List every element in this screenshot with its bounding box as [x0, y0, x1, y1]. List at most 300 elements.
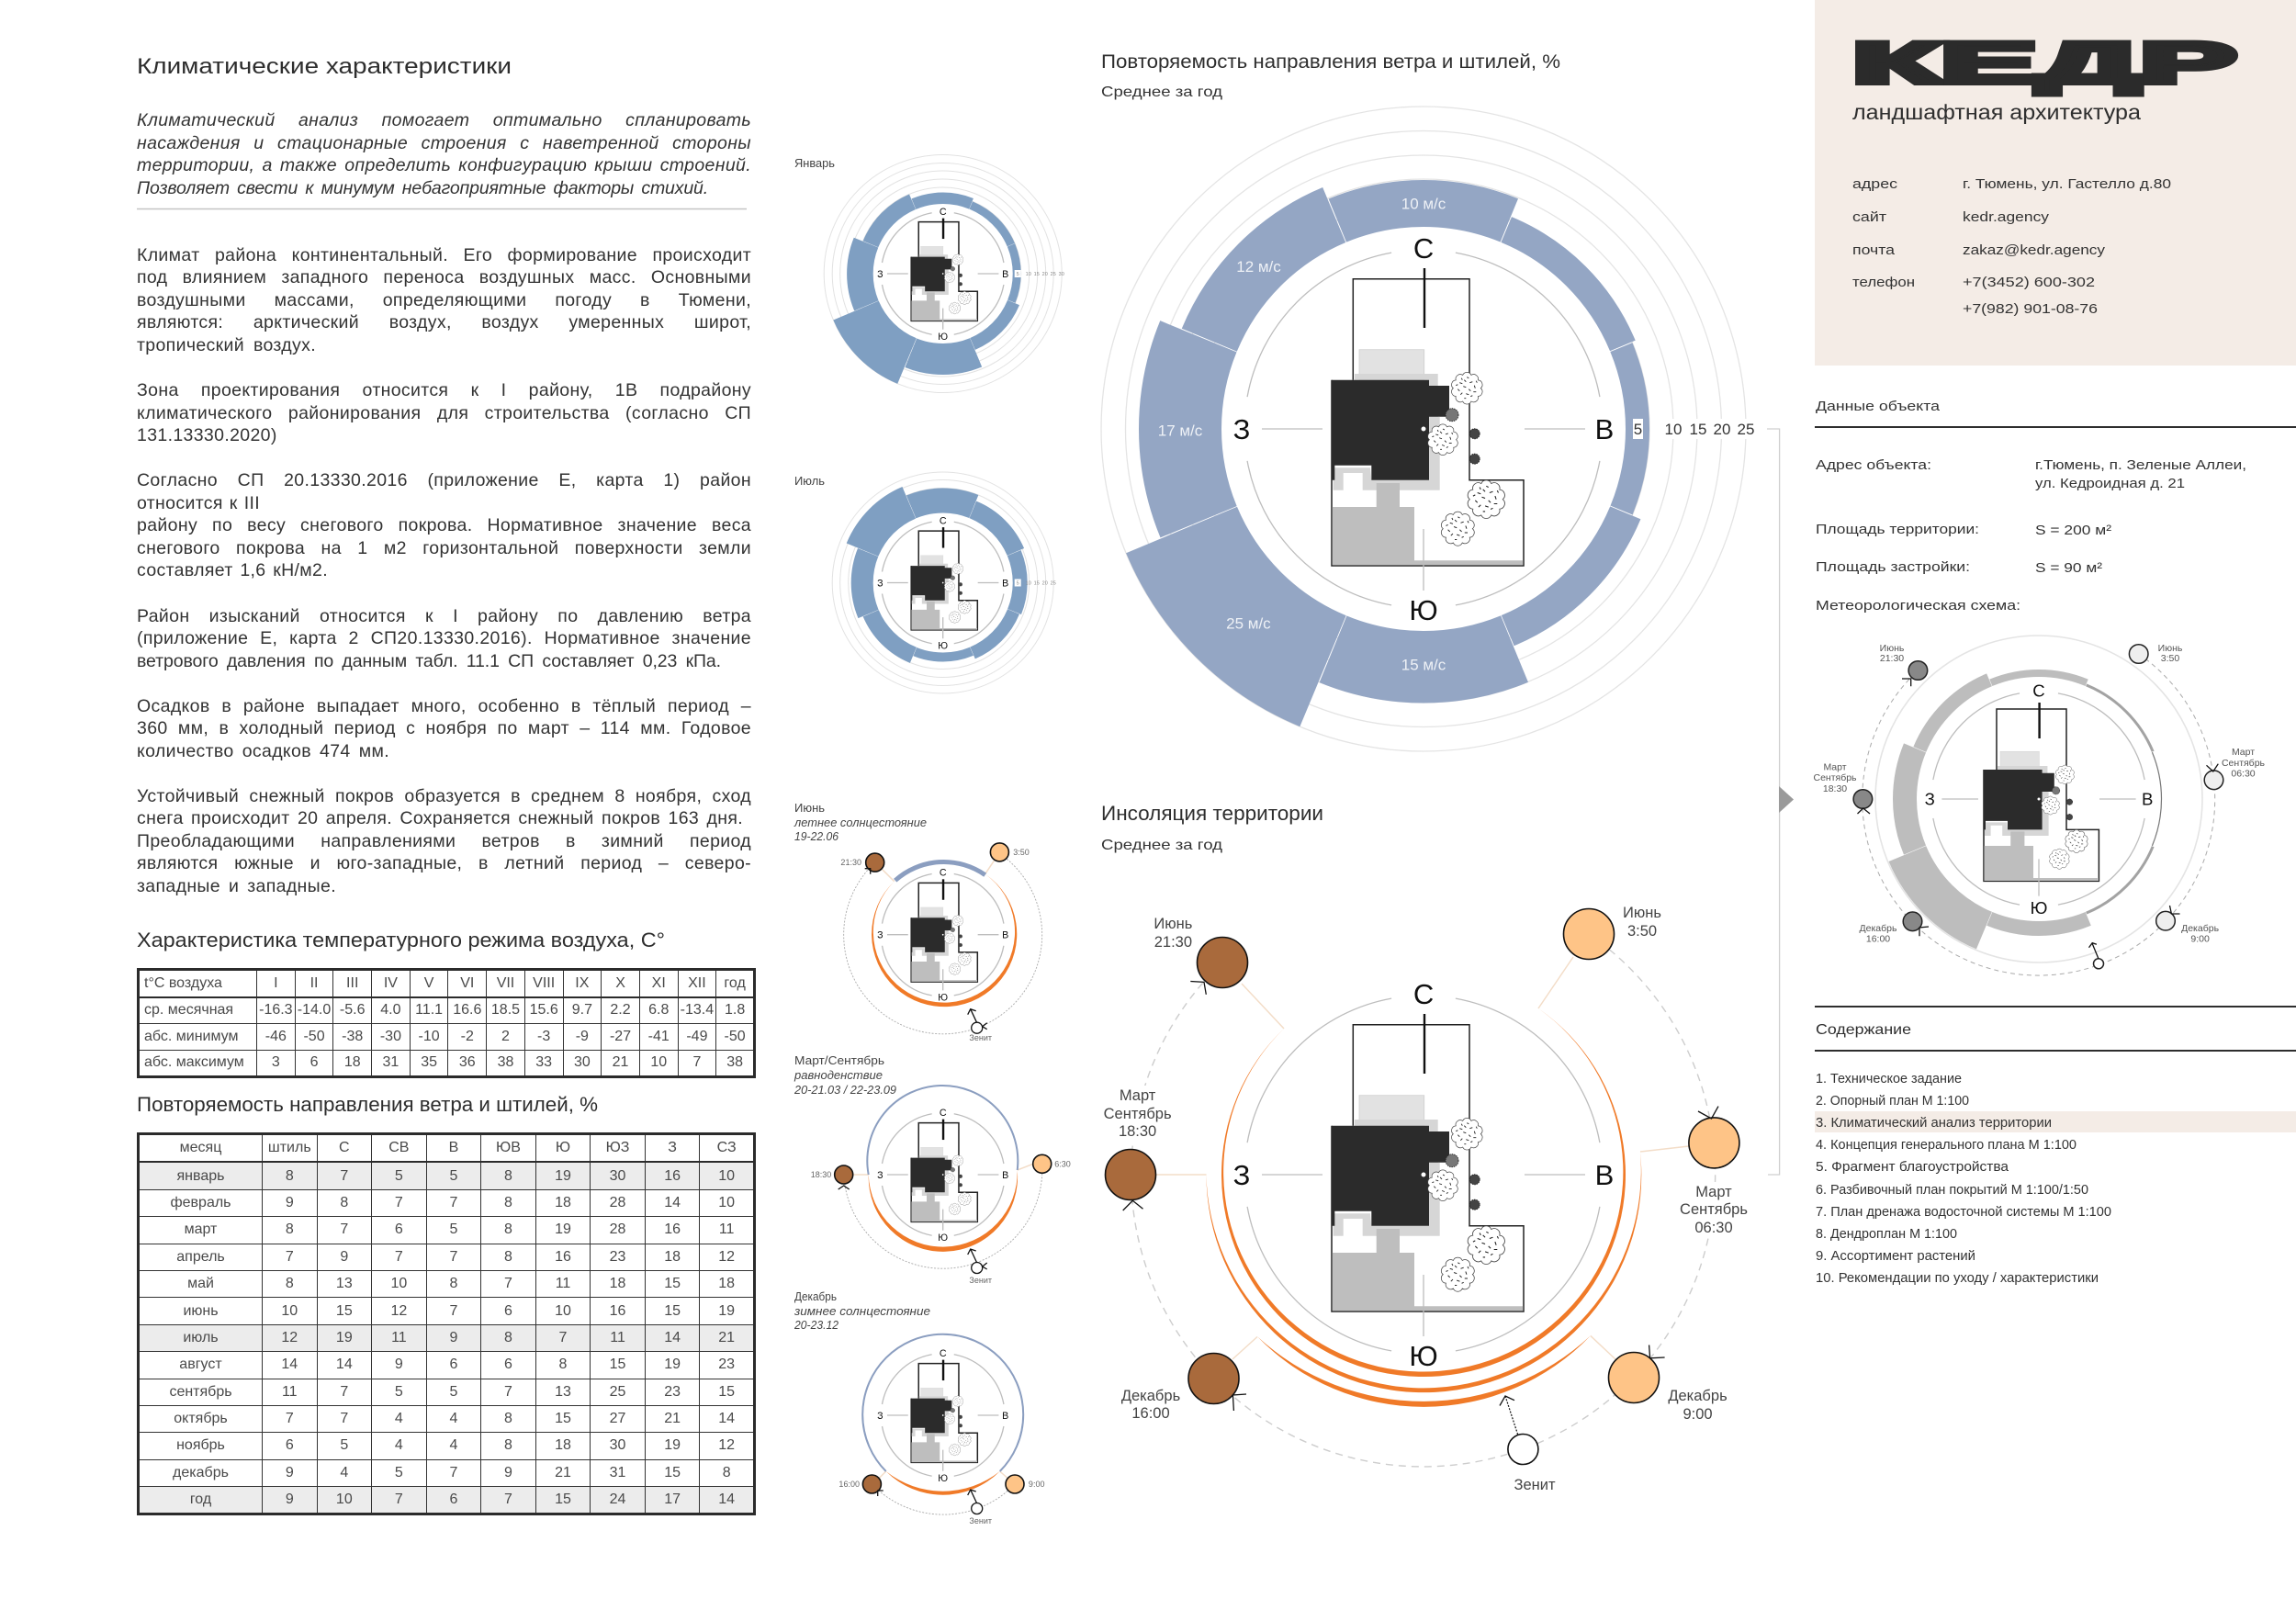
table: wind frequency: 14	[664, 1330, 681, 1345]
table: temperature: -38	[342, 1029, 363, 1044]
subheading: insolation: Среднее за год	[1101, 838, 1223, 853]
sun rays	[1131, 957, 1689, 1359]
text block: snow load: относится к III	[137, 493, 260, 513]
caption: June solstice: летнее солнцестояние	[793, 816, 927, 829]
diagram: July: 15	[1034, 580, 1040, 586]
table: wind frequency: 24	[610, 1492, 625, 1507]
table: temperature: 11.1	[415, 1002, 443, 1018]
sun labels: Июнь	[1880, 643, 1905, 654]
table: temperature: -9	[576, 1029, 589, 1044]
contents list: 4. Концепция генерального плана М 1:100	[1816, 1138, 2077, 1153]
table: wind frequency: 28	[610, 1221, 625, 1237]
table: wind frequency: 9	[286, 1195, 294, 1210]
caption: December solstice	[793, 1289, 930, 1332]
table: temperature: XII	[688, 975, 706, 991]
sun labels: 21:30	[1880, 653, 1904, 664]
text block: wind pressure: ветрового давления по данным табл. 11.1 СП составляет 0,23 кПа.	[137, 651, 721, 671]
table: wind frequency: 5	[395, 1465, 403, 1480]
table: wind frequency: 7	[504, 1492, 512, 1507]
site data list: Адрес объекта:	[1816, 457, 1931, 473]
site data list: Метеорологическая схема:	[1816, 598, 2020, 614]
table: wind frequency: 9	[395, 1356, 403, 1372]
zenith pointer	[1505, 1396, 1518, 1435]
table: wind frequency: 7	[449, 1465, 457, 1480]
diagram: December: Ю	[938, 1473, 948, 1484]
contacts: zakaz@kedr.agency	[1963, 242, 2106, 258]
table: temperature: 38	[498, 1054, 513, 1070]
table: wind frequency: ЮВ	[496, 1140, 521, 1155]
table: wind frequency: 15	[336, 1303, 353, 1319]
table: wind frequency: 16	[610, 1303, 625, 1319]
table: wind frequency: 6	[395, 1221, 403, 1237]
site plan	[1233, 232, 1614, 626]
table: wind frequency: 13	[336, 1276, 353, 1291]
table: wind frequency: сентябрь	[169, 1384, 232, 1400]
table: temperature: ср. месячная	[144, 1002, 233, 1018]
caption: equinox: 20-21.03 / 22-23.09	[793, 1083, 896, 1097]
label backgrounds	[1097, 1086, 1754, 1237]
contents list: 7. План дренажа водосточной системы М 1:100	[1816, 1205, 2111, 1220]
table: temperature: -50	[725, 1029, 746, 1044]
table: temperature: -13.4	[681, 1002, 714, 1018]
table: wind frequency: ЮЗ	[606, 1140, 629, 1155]
table: wind frequency: 19	[555, 1221, 571, 1237]
contacts: +7(982) 901-08-76	[1963, 301, 2098, 317]
panel: company header background	[1815, 0, 2296, 366]
sector speed labels	[1158, 195, 1446, 674]
table: wind frequency: штиль	[268, 1140, 311, 1155]
site plan: З	[1233, 413, 1250, 445]
text block: snow load: составляет 1,6 кН/м2.	[137, 560, 328, 580]
sun labels: Сентябрь	[1813, 772, 1857, 783]
table: wind frequency: 15	[555, 1411, 571, 1426]
table: wind frequency: 14	[718, 1411, 735, 1426]
table: wind frequency: 9	[340, 1249, 348, 1265]
table: temperature: 35	[421, 1054, 437, 1070]
text block: climate: под влиянием западного переноса воздушных масс. Основными	[137, 267, 751, 287]
diagram: June: Зенит	[969, 1033, 992, 1042]
caption: equinox: Март/Сентябрь	[794, 1053, 884, 1067]
table: wind frequency: 7	[340, 1168, 348, 1184]
table: wind frequency: СЗ	[717, 1140, 737, 1155]
diagram: June: С	[940, 868, 947, 879]
site plan: С	[1413, 978, 1434, 1010]
table: temperature: 36	[459, 1054, 476, 1070]
table: wind frequency: 8	[504, 1249, 512, 1265]
table: wind frequency: 7	[449, 1195, 457, 1210]
orange insolation arcs	[1207, 1008, 1641, 1407]
sun labels: 9:00	[1683, 1406, 1713, 1423]
table: wind frequency: 6	[504, 1356, 512, 1372]
table: wind frequency: 31	[610, 1465, 625, 1480]
table: wind frequency: 16	[664, 1221, 681, 1237]
text block: climate: Климат района континентальный. Его формирование происходит	[137, 244, 751, 265]
sector speed labels: 10 м/с	[1401, 195, 1446, 213]
sun labels: Март	[1823, 762, 1847, 773]
contents rules	[1815, 1007, 2296, 1051]
table: wind frequency: 8	[286, 1276, 294, 1291]
contacts: телефон	[1852, 275, 1915, 290]
table: wind frequency: 15	[610, 1356, 625, 1372]
sun labels: 3:50	[2161, 653, 2179, 664]
diagram: December: 9:00	[1029, 1480, 1044, 1489]
bracket linking the two diagrams	[1767, 429, 1780, 1175]
diagram: June: Ю	[938, 992, 948, 1003]
table: temperature: год	[724, 975, 746, 991]
diagram: equinox: 18:30	[811, 1170, 831, 1179]
table: wind frequency	[137, 1132, 756, 1515]
mini insolation: December	[793, 1289, 1044, 1525]
table: temperature: VIII	[533, 975, 555, 991]
diagram: June: 3:50	[1013, 848, 1030, 857]
intro text block: территории, а также определить конфигурацию крыши строений.	[137, 155, 751, 175]
meteorological scheme	[1809, 613, 2268, 985]
table: wind frequency: 10	[555, 1303, 571, 1319]
table: temperature: -14.0	[298, 1002, 331, 1018]
table: wind frequency: 4	[395, 1411, 403, 1426]
main insolation chart	[1097, 905, 1754, 1493]
sector speed labels: 15 м/с	[1401, 656, 1446, 674]
table: wind frequency: март	[185, 1221, 217, 1237]
diagram: June: 21:30	[840, 858, 861, 867]
text block: precipitation: количество осадков 474 мм.	[137, 741, 389, 761]
table: wind frequency: СВ	[388, 1140, 409, 1155]
table: wind frequency: 19	[718, 1303, 735, 1319]
arrow toward site data	[1779, 786, 1794, 813]
text block: wind pressure: (приложение Е, карта 2 СП20.13330.2016). Нормативное значение	[137, 628, 751, 648]
sun path arrowheads	[1123, 981, 1718, 1411]
sun labels	[1813, 643, 2266, 944]
caption: equinox: равноденствие	[793, 1068, 883, 1082]
site plan: Ю	[1409, 594, 1438, 626]
table: wind frequency: 8	[504, 1437, 512, 1453]
table: wind frequency: С	[339, 1140, 350, 1155]
diagram: equinox: Зенит	[969, 1276, 992, 1285]
table: wind frequency: апрель	[176, 1249, 225, 1265]
diagram: equinox	[811, 1086, 1071, 1285]
table: wind frequency: 13	[555, 1384, 571, 1400]
table: wind frequency: 12	[718, 1249, 735, 1265]
table: wind frequency: 25	[610, 1384, 625, 1400]
diagram: equinox: С	[940, 1108, 947, 1119]
site plan: С	[1413, 232, 1434, 265]
sun labels: Сентябрь	[1680, 1201, 1748, 1218]
text block: wind pressure	[137, 606, 751, 671]
heading: wind frequency table: Повторяемость направления ветра и штилей, %	[137, 1093, 598, 1116]
table: wind frequency: 7	[340, 1411, 348, 1426]
table: temperature: VII	[497, 975, 514, 991]
table: wind frequency: июнь	[183, 1303, 219, 1319]
table: wind frequency: 9	[504, 1465, 512, 1480]
site plan: В	[1595, 1159, 1614, 1191]
table: wind frequency: 14	[664, 1195, 681, 1210]
table: wind frequency: 8	[504, 1221, 512, 1237]
table: wind frequency: 5	[395, 1168, 403, 1184]
sun labels: 16:00	[1131, 1405, 1170, 1422]
caption: December solstice: Декабрь	[794, 1289, 837, 1303]
table: wind frequency: 11	[719, 1221, 734, 1237]
diagram: January: 25	[1051, 272, 1056, 277]
table: wind frequency: 18	[555, 1195, 571, 1210]
table: wind frequency: 10	[336, 1492, 353, 1507]
sun labels: Сентябрь	[2222, 758, 2266, 769]
table: wind frequency: 10	[718, 1168, 735, 1184]
diagram: December: З	[877, 1411, 884, 1422]
sun labels: 06:30	[2231, 768, 2256, 779]
table: temperature: 10	[650, 1054, 667, 1070]
text block: snow load: району по весу снегового покрова. Нормативное значение веса	[137, 515, 751, 535]
caption: December solstice: зимнее солнцестояние	[793, 1304, 930, 1318]
site plan	[1233, 978, 1614, 1372]
contents list: 3. Климатический анализ территории	[1816, 1116, 2052, 1131]
contacts: сайт	[1852, 209, 1886, 225]
table: wind frequency: 11	[610, 1330, 625, 1345]
site data list: S = 90 м²	[2035, 560, 2102, 576]
scale labels: 10	[1665, 421, 1682, 438]
table: wind frequency: 14	[718, 1492, 735, 1507]
diagram: equinox: Ю	[938, 1233, 948, 1244]
scale labels: 5	[1634, 421, 1642, 438]
table: wind frequency: 10	[281, 1303, 298, 1319]
diagram: July: В	[1002, 578, 1008, 589]
table: temperature: -27	[610, 1029, 631, 1044]
site data list: ул. Кедроидная д. 21	[2035, 476, 2185, 491]
table: temperature: абс. минимум	[144, 1029, 238, 1044]
mini insolation: June	[793, 801, 1042, 1042]
mini insolation: March / September	[793, 1053, 1071, 1285]
table: wind frequency: 5	[340, 1437, 348, 1453]
table: temperature: 4.0	[380, 1002, 401, 1018]
table: wind frequency: июль	[183, 1330, 219, 1345]
caption: December solstice: 20-23.12	[793, 1318, 839, 1332]
table: temperature: IX	[575, 975, 589, 991]
text block: snow load	[137, 470, 751, 580]
contacts: г. Тюмень, ул. Гастелло д.80	[1963, 176, 2171, 192]
sector speed labels: 25 м/с	[1226, 615, 1271, 632]
table: wind frequency: 8	[504, 1195, 512, 1210]
contents list: 5. Фрагмент благоустройства	[1816, 1160, 2009, 1175]
table: wind frequency: 5	[449, 1384, 457, 1400]
table: wind frequency: Ю	[556, 1140, 570, 1155]
table: temperature: 16.6	[453, 1002, 481, 1018]
text block: climate: воздушными массами, определяющими погоду в Тюмени,	[137, 290, 751, 310]
table: temperature: -10	[419, 1029, 440, 1044]
sector speed labels: 12 м/с	[1236, 258, 1281, 276]
sun labels: Июнь	[2158, 643, 2183, 654]
table: temperature	[137, 968, 756, 1078]
logo: КЕДР	[1852, 31, 2236, 96]
table: wind frequency: 8	[340, 1195, 348, 1210]
text block: snow cover: западные и западные.	[137, 876, 336, 896]
table: temperature: -50	[303, 1029, 325, 1044]
diagram: June: З	[877, 929, 884, 940]
table: temperature: 2.2	[610, 1002, 631, 1018]
sunset suns	[1106, 937, 1247, 1403]
diagram: July: 20	[1042, 580, 1048, 586]
table: wind frequency: 7	[395, 1492, 403, 1507]
table: temperature: 3	[272, 1054, 280, 1070]
text block: snow cover: Преобладающими направлениями ветров в зимний период	[137, 831, 751, 851]
sun labels: 16:00	[1866, 933, 1890, 944]
table: wind frequency: 12	[718, 1437, 735, 1453]
table: wind frequency: 18	[555, 1437, 571, 1453]
table: temperature: 31	[382, 1054, 399, 1070]
table: temperature: X	[615, 975, 625, 991]
contacts: +7(3452) 600-302	[1963, 275, 2095, 290]
text block: snow load: Согласно СП 20.13330.2016 (приложение Е, карта 1) район	[137, 470, 751, 490]
sun labels: Зенит	[1514, 1477, 1556, 1493]
diagram: January: 10	[1026, 272, 1031, 277]
diagram: December	[838, 1334, 1044, 1525]
site data list: Площадь территории:	[1816, 522, 1979, 537]
table: temperature: -30	[380, 1029, 401, 1044]
sun labels: Март	[2232, 747, 2255, 758]
table: wind frequency: 12	[390, 1303, 407, 1319]
table: wind frequency: 11	[556, 1276, 570, 1291]
table: wind frequency: год	[190, 1492, 211, 1507]
site plan: В	[1595, 413, 1614, 445]
diagram: July: 10	[1026, 580, 1031, 586]
table: wind frequency: 6	[286, 1437, 294, 1453]
table: wind frequency: 15	[555, 1492, 571, 1507]
table: wind frequency: 4	[449, 1437, 457, 1453]
sun labels: Декабрь	[2181, 923, 2220, 934]
table: wind frequency: 4	[395, 1437, 403, 1453]
text block: snow cover	[137, 786, 751, 896]
table: wind frequency: 5	[395, 1384, 403, 1400]
text block: climate: тропический воздух.	[137, 335, 316, 355]
table: wind frequency: 16	[555, 1249, 571, 1265]
text block: climate	[137, 244, 751, 355]
caption: June solstice: 19-22.06	[794, 829, 839, 843]
table: wind frequency: 7	[504, 1276, 512, 1291]
title: Климатические характеристики	[137, 54, 512, 79]
diagram: January: 15	[1034, 272, 1040, 277]
table: wind frequency: 7	[449, 1249, 457, 1265]
grey wind sectors	[1852, 613, 2225, 985]
diagram: December: 16:00	[838, 1480, 860, 1489]
caption: equinox	[793, 1053, 896, 1097]
contents list: 8. Дендроплан М 1:100	[1816, 1227, 1957, 1242]
diagram: July: 25	[1051, 580, 1056, 586]
table: wind frequency: 5	[449, 1221, 457, 1237]
table: temperature: 18.5	[491, 1002, 520, 1018]
sun labels: 21:30	[1154, 934, 1192, 951]
table: wind frequency: 4	[340, 1465, 348, 1480]
dashed sun path	[1863, 654, 2215, 975]
contents list: 10. Рекомендации по уходу / характеристики	[1816, 1271, 2099, 1286]
diagram: January: 20	[1042, 272, 1048, 277]
text block: snow cover: Устойчивый снежный покров образуется в среднем 8 ноября, сход	[137, 786, 751, 806]
sun labels: Декабрь	[1121, 1388, 1180, 1404]
sun labels: Март	[1695, 1184, 1732, 1200]
contents list: 1. Техническое задание	[1816, 1072, 1962, 1086]
subheading: wind rose: Среднее за год	[1101, 84, 1223, 100]
diagram: January: З	[877, 269, 884, 280]
table: wind frequency: 19	[664, 1356, 681, 1372]
diagram: July: С	[940, 515, 947, 526]
table: wind frequency: 30	[610, 1168, 625, 1184]
table: wind frequency: октябрь	[174, 1411, 228, 1426]
table: temperature: XI	[652, 975, 666, 991]
table: wind frequency: 8	[723, 1465, 731, 1480]
tagline: ландшафтная архитектура	[1852, 100, 2141, 124]
table: wind frequency: 19	[664, 1437, 681, 1453]
table: wind frequency: 15	[664, 1465, 681, 1480]
table: wind frequency: 10	[390, 1276, 407, 1291]
table: wind frequency: ноябрь	[176, 1437, 225, 1453]
table: wind frequency: 18	[664, 1249, 681, 1265]
sun labels: Март	[1120, 1087, 1156, 1104]
diagram: December: Зенит	[969, 1516, 992, 1525]
intro text block: насаждения и стационарные строения с наветренной стороны	[137, 133, 751, 153]
text block: zone	[137, 380, 751, 445]
sun labels: Декабрь	[1668, 1388, 1728, 1404]
table: wind frequency: 15	[664, 1303, 681, 1319]
table: temperature: -2	[461, 1029, 474, 1044]
table: temperature: 1.8	[725, 1002, 745, 1018]
text block: precipitation: Осадков в районе выпадает много, особенно в тёплый период –	[137, 696, 751, 716]
table: wind frequency: 9	[286, 1465, 294, 1480]
heading: insolation: Инсоляция территории	[1101, 802, 1323, 825]
main wind rose chart	[1081, 86, 1766, 771]
site data list: Площадь застройки:	[1816, 559, 1970, 575]
contacts: почта	[1852, 242, 1896, 258]
intro text block: Климатический анализ помогает оптимально спланировать	[137, 110, 751, 130]
table: temperature: -5.6	[340, 1002, 366, 1018]
diagram: January: 30	[1059, 272, 1064, 277]
sector speed labels: 17 м/с	[1158, 422, 1203, 439]
table: wind frequency: 8	[559, 1356, 567, 1372]
table: wind frequency: 9	[449, 1330, 457, 1345]
table: wind frequency: 4	[449, 1411, 457, 1426]
diagram: June: В	[1002, 929, 1008, 940]
diagram: equinox: В	[1002, 1170, 1008, 1181]
site data list: S = 200 м²	[2035, 523, 2111, 538]
diagram: December: В	[1002, 1411, 1008, 1422]
table: temperature: -16.3	[259, 1002, 293, 1018]
text block: snow cover: снега происходит 20 апреля. Сохраняется снежный покров 163 дня.	[137, 808, 743, 828]
scale labels	[1633, 419, 1754, 439]
text block: precipitation	[137, 696, 751, 761]
diagram: July	[829, 469, 1057, 696]
text block: zone: 131.13330.2020)	[137, 425, 277, 445]
table: wind frequency: 8	[504, 1330, 512, 1345]
table: wind frequency: 9	[286, 1492, 294, 1507]
scale labels: 20	[1714, 421, 1730, 438]
heading: site data: Данные объекта	[1816, 399, 1941, 414]
table: wind frequency: 7	[340, 1221, 348, 1237]
table: temperature: IV	[384, 975, 398, 991]
table: wind frequency: 23	[718, 1356, 735, 1372]
table: wind frequency: 6	[504, 1303, 512, 1319]
table: wind frequency: месяц	[180, 1140, 221, 1155]
site plan: В	[2142, 790, 2153, 809]
table: temperature: 15.6	[530, 1002, 558, 1018]
table: wind frequency: 15	[718, 1384, 735, 1400]
table: wind frequency: 21	[555, 1465, 571, 1480]
table: wind frequency: 14	[281, 1356, 298, 1372]
arrowheads	[1857, 679, 2218, 959]
site plan: З	[1233, 1159, 1250, 1191]
table: temperature: 38	[726, 1054, 743, 1070]
sun labels: 18:30	[1119, 1123, 1156, 1140]
table: temperature: 6	[310, 1054, 318, 1070]
table: wind frequency: 18	[610, 1276, 625, 1291]
heading: contents: Содержание	[1816, 1022, 1911, 1038]
table: wind frequency: 19	[555, 1168, 571, 1184]
rule under site data	[1815, 426, 2296, 428]
